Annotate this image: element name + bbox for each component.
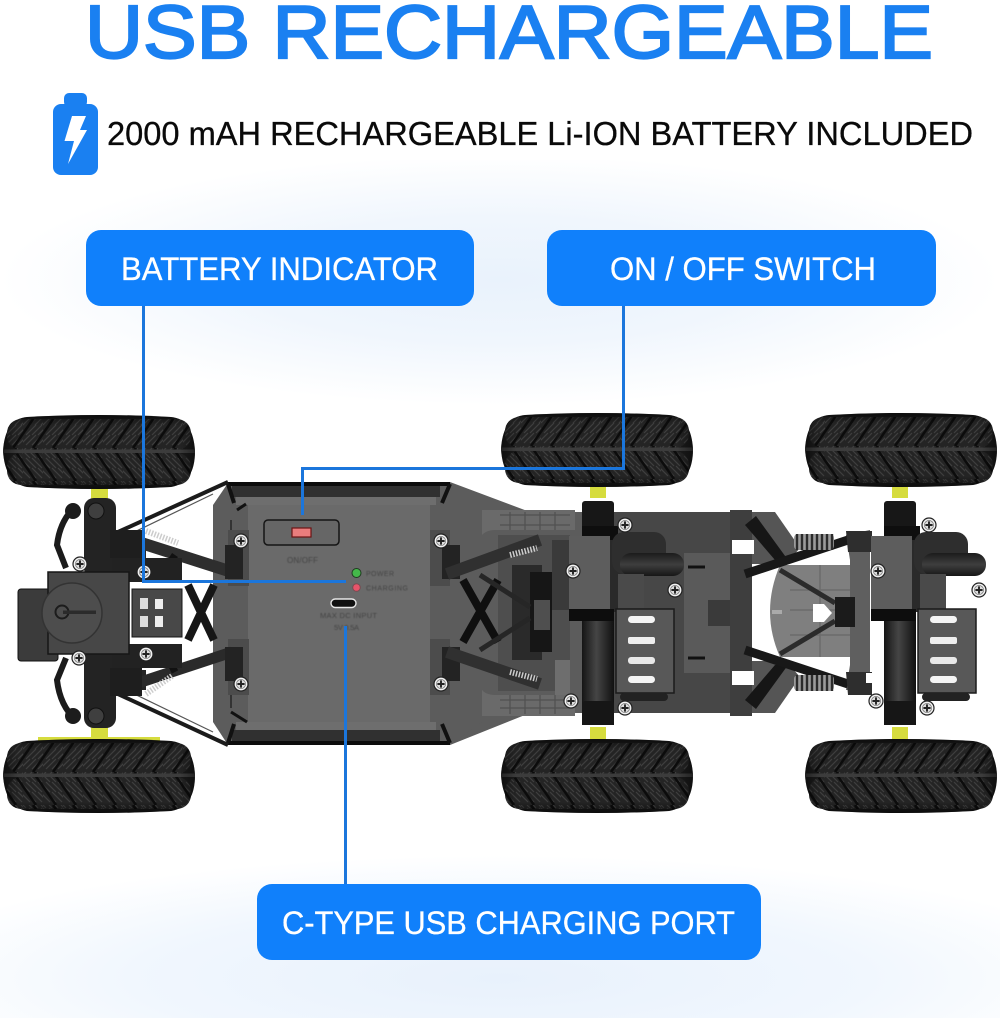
subtitle: 2000 mAH RECHARGEABLE Li-ION BATTERY INCLUDED: [107, 115, 973, 152]
axle modules: [569, 501, 986, 725]
connector: battery indicator: [144, 305, 346, 582]
chassis struts: [118, 482, 228, 745]
steering links: [57, 506, 76, 720]
led charging: CHARGING: [366, 586, 408, 592]
label: battery indicator: BATTERY INDICATOR: [121, 251, 438, 287]
middle chassis grid: [450, 482, 612, 745]
front suspension: [120, 531, 540, 694]
car chassis: [3, 413, 997, 813]
label: battery indicator: [86, 230, 474, 306]
label: on/off switch: [547, 230, 936, 306]
label: dc input: MAX DC INPUT: [320, 611, 377, 620]
wheels: [3, 413, 997, 813]
steering columns: [84, 498, 116, 578]
steering dial: [42, 583, 102, 643]
connector: on/off switch: [302, 305, 624, 515]
steering housing: [18, 572, 129, 661]
screws: [72, 518, 986, 715]
led power: POWER: [366, 571, 394, 578]
front axle: [18, 498, 182, 728]
rear chassis frame: [612, 510, 872, 716]
label: c-type usb charging port: [257, 884, 761, 960]
servo panel: [132, 589, 182, 637]
label: c-type usb charging port: C-TYPE USB CHARGING PORT: [282, 905, 735, 941]
usb-c port: [331, 599, 356, 608]
icon: lightning bolt: [64, 116, 87, 164]
label: on/off: ON/OFF: [287, 556, 318, 565]
springs rear: [794, 534, 876, 691]
led power: [352, 568, 394, 578]
label: voltage: 5V 0.5A: [334, 623, 359, 632]
on/off switch: [264, 520, 339, 545]
battery compartment: [118, 482, 482, 745]
connector: charging port: [344, 626, 347, 885]
led charging: [353, 584, 408, 592]
battery plate: [248, 505, 430, 722]
axles yellow: [38, 483, 908, 744]
label: on/off switch: ON / OFF SWITCH: [610, 251, 876, 287]
icon: battery: [53, 93, 98, 175]
